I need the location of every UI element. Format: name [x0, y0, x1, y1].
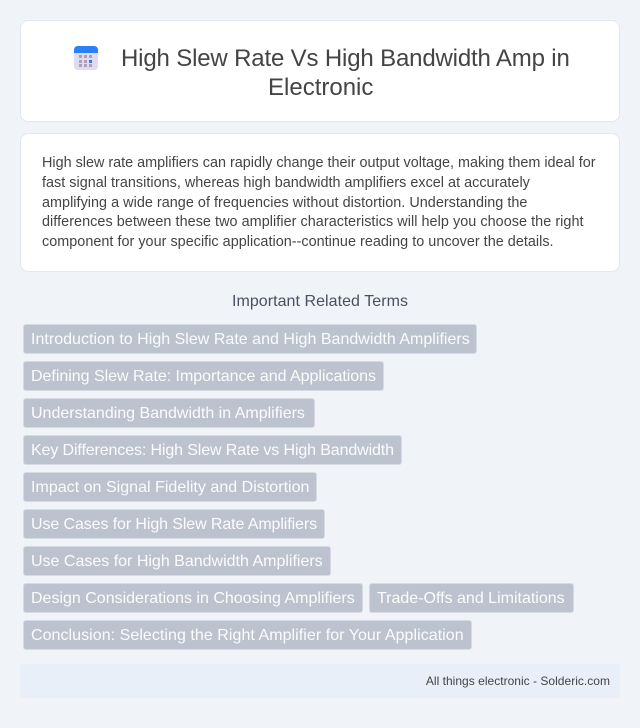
chip 8: [23, 583, 363, 613]
intro text: amplifying a wide range of frequencies without distortion. Understanding the: [42, 195, 527, 211]
chip 3: Understanding Bandwidth in Amplifiers: [31, 405, 305, 422]
chip 5: [23, 472, 317, 502]
chip 5: Impact on Signal Fidelity and Distortion: [31, 479, 309, 496]
intro text: component for your specific application--continue reading to uncover the details.: [42, 234, 554, 250]
chip 4: [23, 435, 402, 465]
chip 1: Introduction to High Slew Rate and High Bandwidth Amplifiers: [31, 331, 470, 348]
chip 10: Conclusion: Selecting the Right Amplifier for Your Application: [31, 627, 464, 644]
chip 9: [369, 583, 574, 613]
chip 6: [23, 509, 325, 539]
chip 7: Use Cases for High Bandwidth Amplifiers: [31, 553, 323, 570]
chip 1: [23, 324, 477, 354]
chip 2: [23, 361, 384, 391]
chip 6: Use Cases for High Slew Rate Amplifiers: [31, 516, 317, 533]
section heading: Important Related Terms: [232, 293, 408, 310]
chip 8: Design Considerations in Choosing Amplifiers: [31, 590, 355, 607]
intro text: High slew rate amplifiers can rapidly change their output voltage, making them ideal for: [42, 155, 596, 171]
title: Electronic: [268, 74, 373, 101]
footer bar: [20, 664, 620, 698]
intro text: [42, 155, 596, 250]
header card: [20, 20, 620, 122]
term chips: [23, 324, 574, 650]
intro text: differences between these two amplifier characteristics will help you choose the right: [42, 214, 584, 230]
chip 10: [23, 620, 472, 650]
title: High Slew Rate Vs High Bandwidth Amp in: [121, 45, 570, 72]
footer text: All things electronic - Solderic.com: [426, 674, 610, 688]
intro card: [20, 133, 620, 272]
chip 4: Key Differences: High Slew Rate vs High Bandwidth: [31, 442, 394, 459]
title: [121, 45, 570, 101]
intro text: fast signal transitions, whereas high bandwidth amplifiers excel at accurately: [42, 175, 530, 191]
chip 9: Trade-Offs and Limitations: [377, 590, 565, 607]
chip 3: [23, 398, 315, 428]
chip 2: Defining Slew Rate: Importance and Applications: [31, 368, 376, 385]
icon: calendar: [74, 46, 98, 70]
chip 7: [23, 546, 331, 576]
